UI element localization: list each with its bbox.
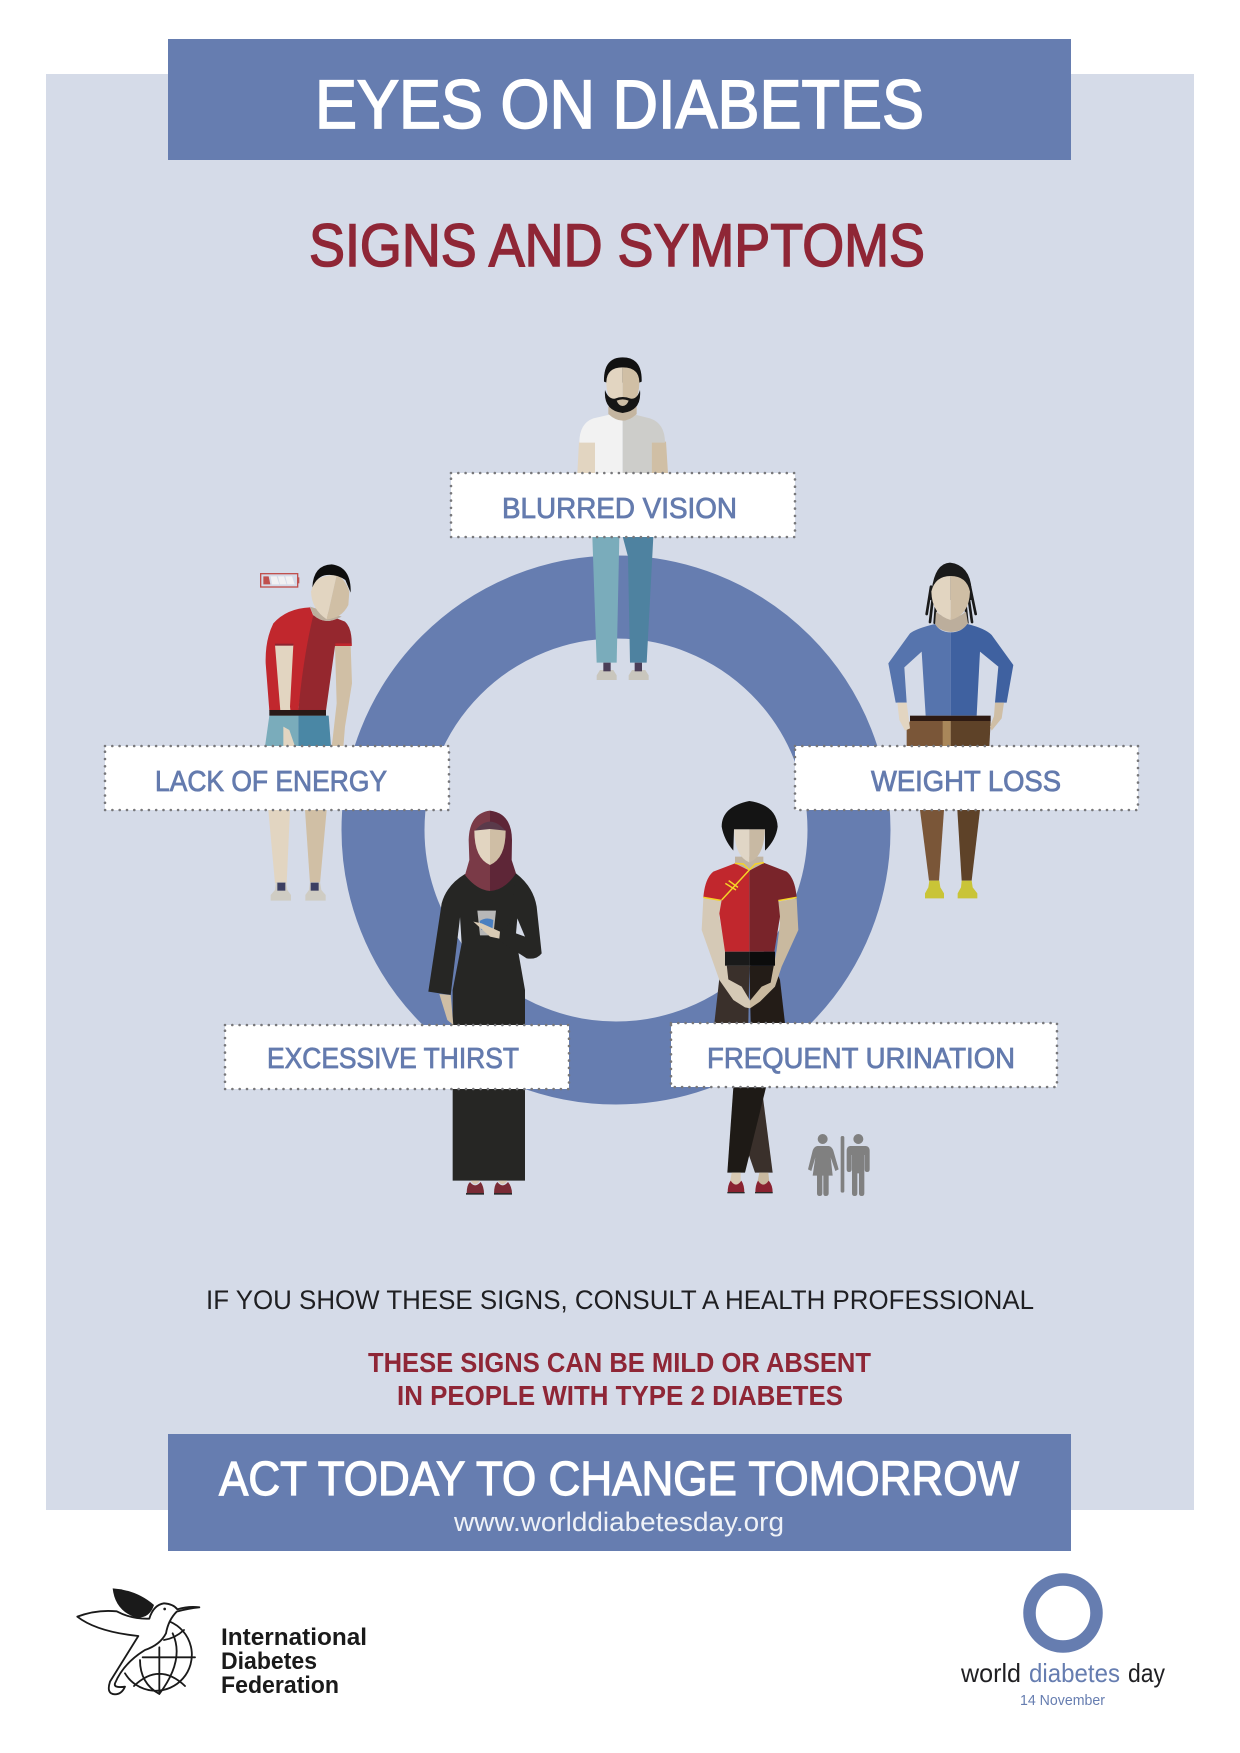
figure: woman with frequent urination xyxy=(702,801,798,1193)
warning text: THESE SIGNS CAN BE MILD OR ABSENT xyxy=(368,1347,871,1378)
background panel xyxy=(46,74,1194,1510)
figure: man with blurred vision xyxy=(577,357,668,680)
logo: world diabetes day: day xyxy=(1128,1658,1165,1688)
title: EYES ON DIABETES xyxy=(315,66,924,143)
figure: tired man with lack of energy xyxy=(261,564,352,901)
advice text: IF YOU SHOW THESE SIGNS, CONSULT A HEALTH PROFESSIONAL xyxy=(206,1285,1034,1315)
organisation name xyxy=(221,1624,367,1699)
warning text xyxy=(368,1347,871,1411)
logo: world diabetes day: 14 November xyxy=(1020,1692,1105,1709)
logo: world diabetes day xyxy=(960,1580,1165,1709)
label: blurred vision xyxy=(451,473,795,537)
subtitle: SIGNS AND SYMPTOMS xyxy=(309,212,925,279)
label: excessive thirst xyxy=(225,1025,569,1089)
central blue ring xyxy=(383,597,849,1063)
figure: man with weight loss xyxy=(888,563,1013,898)
hummingbird and globe xyxy=(77,1588,199,1694)
header band with title xyxy=(168,39,1071,160)
organisation name: Diabetes xyxy=(221,1648,317,1675)
website: www.worlddiabetesday.org xyxy=(453,1507,784,1537)
label: frequent urination xyxy=(671,1023,1057,1087)
logo: world diabetes day: diabetes xyxy=(1029,1658,1120,1688)
label: lack of energy xyxy=(105,746,449,810)
icon: low battery xyxy=(261,574,299,587)
organisation name: International xyxy=(221,1624,367,1651)
label: blurred vision: BLURRED VISION xyxy=(502,493,737,525)
slogan: ACT TODAY TO CHANGE TOMORROW xyxy=(219,1453,1020,1506)
glass of water xyxy=(473,911,500,939)
label: weight loss: WEIGHT LOSS xyxy=(871,766,1061,798)
logo: world diabetes day: world xyxy=(960,1658,1021,1688)
label: lack of energy: LACK OF ENERGY xyxy=(155,766,387,798)
yellow trims on dress xyxy=(703,863,797,901)
logo: International Diabetes Federation xyxy=(77,1588,367,1699)
icon: toilet signs xyxy=(808,1134,870,1196)
label: weight loss xyxy=(795,746,1138,810)
figure: woman with excessive thirst xyxy=(428,811,542,1195)
footer band with call to action xyxy=(168,1434,1071,1551)
warning text: IN PEOPLE WITH TYPE 2 DIABETES xyxy=(397,1380,843,1411)
label: frequent urination: FREQUENT URINATION xyxy=(707,1043,1015,1075)
label: excessive thirst: EXCESSIVE THIRST xyxy=(267,1043,519,1075)
organisation name: Federation xyxy=(221,1672,339,1699)
